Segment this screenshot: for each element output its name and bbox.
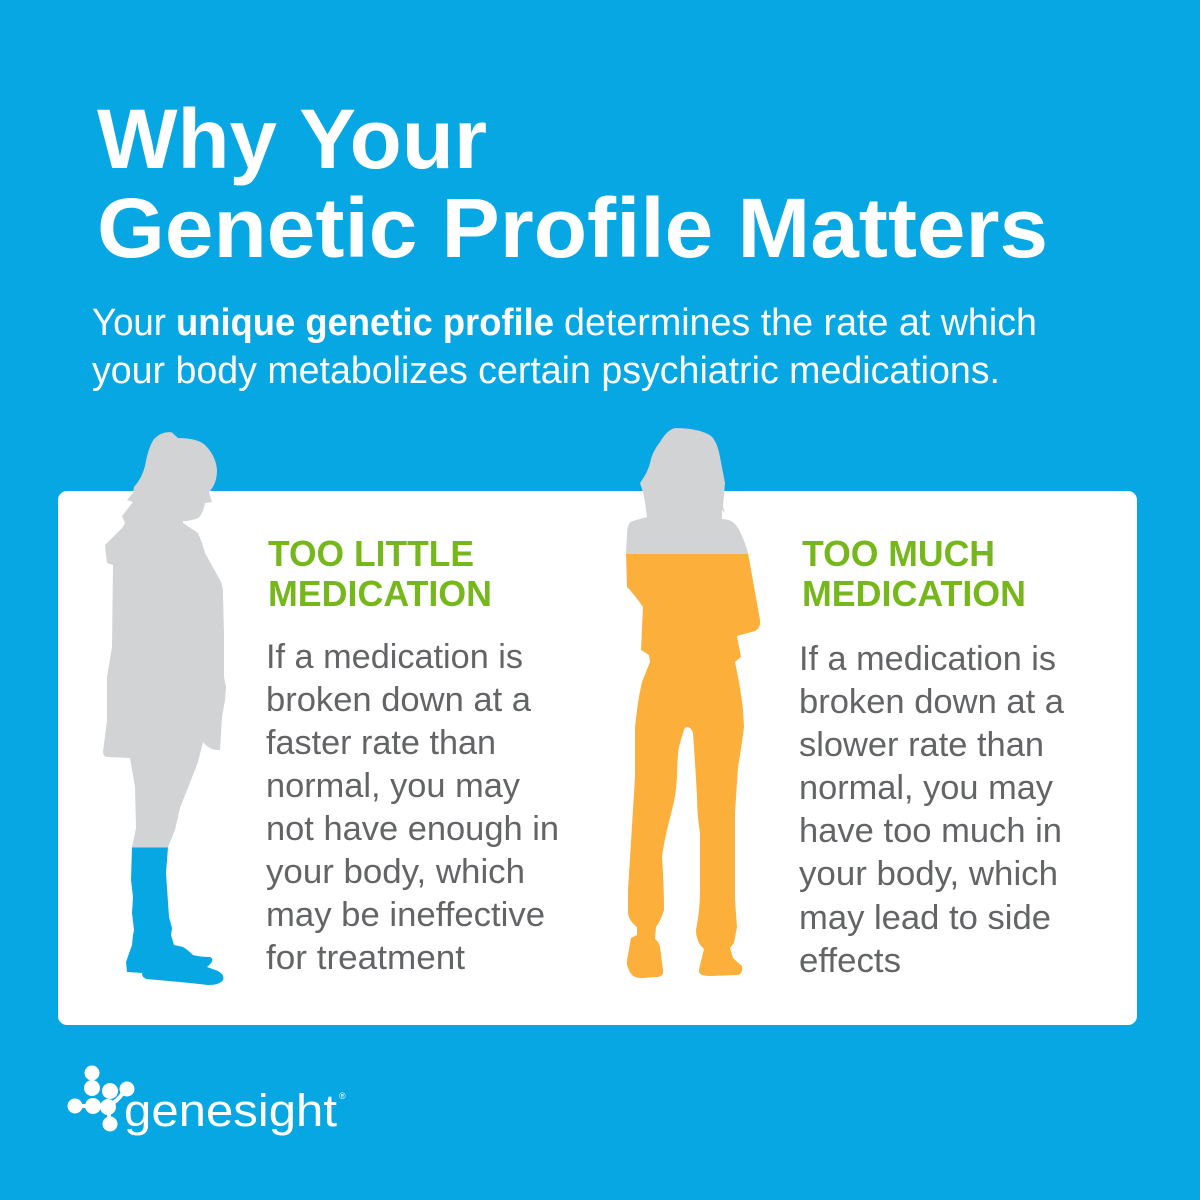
text block: too much medication explanation: slower rate than [799, 726, 1044, 764]
text block: too much medication explanation: have too much in [799, 812, 1062, 850]
text block: too little medication explanation: normal, you may [266, 767, 520, 805]
heading: too little medication: TOO LITTLE [268, 533, 474, 574]
figure: person with too little medication [103, 432, 226, 985]
icon: molecule mark [68, 1066, 134, 1132]
title [97, 92, 1048, 275]
text block: too much medication explanation: broken down at a [799, 683, 1064, 721]
text block: too much medication explanation: normal, you may [799, 769, 1053, 807]
text block: too much medication explanation: may lead to side [799, 899, 1051, 937]
text block: too little medication explanation: may be ineffective [266, 896, 545, 934]
heading: too little medication: MEDICATION [268, 573, 492, 614]
text block: too little medication explanation: faster rate than [266, 724, 496, 762]
text block: too little medication explanation: If a medication is [266, 638, 523, 676]
figure: person with too much medication [626, 428, 760, 978]
subtitle text block: your body metabolizes certain psychiatric medications. [92, 350, 1000, 392]
text block: too much medication explanation [799, 640, 1064, 980]
text block: too little medication explanation: broken down at a [266, 681, 531, 719]
text block: too much medication explanation: your body, which [799, 855, 1058, 893]
panel: white card [58, 491, 1137, 1025]
title: Why Your [97, 92, 487, 186]
subtitle text block: determines the rate at which [564, 302, 1037, 344]
text block: too much medication explanation: effects [799, 942, 901, 980]
text block: too little medication explanation: not have enough in [266, 810, 559, 848]
subtitle text block [92, 302, 1037, 392]
logo wordmark: genesight [124, 1085, 338, 1136]
logo: genesight [68, 1066, 346, 1136]
heading: too much medication: MEDICATION [802, 573, 1026, 614]
text block: too much medication explanation: If a medication is [799, 640, 1056, 678]
subtitle text block: Your [92, 302, 166, 344]
heading: too much medication [802, 533, 1026, 614]
heading: too little medication [268, 533, 492, 614]
subtitle text block: unique genetic profile [176, 302, 554, 344]
text block: too little medication explanation: for treatment [266, 939, 466, 977]
text block: too little medication explanation [266, 638, 559, 977]
title: Genetic Profile Matters [97, 181, 1048, 275]
heading: too much medication: TOO MUCH [802, 533, 995, 574]
text block: too little medication explanation: your body, which [266, 853, 525, 891]
registered mark: ® [339, 1091, 346, 1101]
